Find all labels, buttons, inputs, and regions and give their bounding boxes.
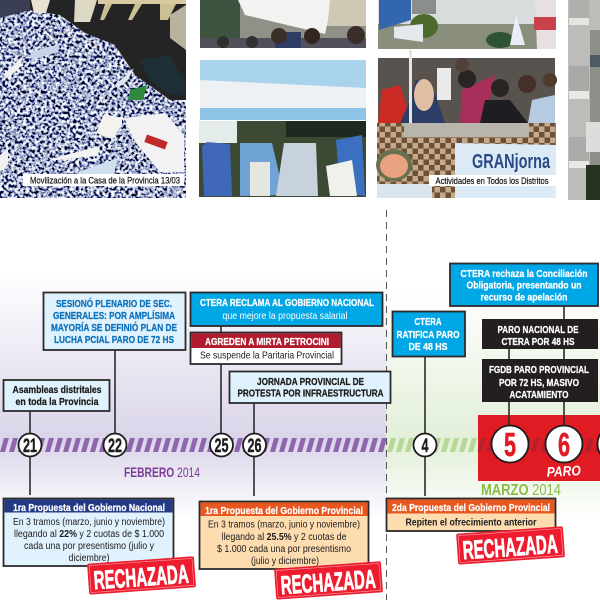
month: febrero: FEBRERO 2014 bbox=[124, 464, 200, 480]
stamp: Rechazada 2: RECHAZADA bbox=[280, 564, 377, 600]
box: Asambleas distritales: en toda la Provincia bbox=[16, 397, 99, 408]
box: Sesionó plenario: GENERALES: POR AMPLÍSIMA bbox=[53, 309, 175, 322]
box: CTERA ratifica: DE 48 HS bbox=[408, 342, 448, 353]
box: Paro nacional: PARO NACIONAL DE bbox=[498, 325, 579, 336]
box: Asambleas distritales: Asambleas distritales bbox=[12, 385, 102, 396]
date: 22 bbox=[104, 434, 126, 457]
caption: Actividades: Actividades en Todos los Distritos bbox=[436, 176, 549, 186]
connector lines bbox=[30, 306, 564, 496]
photo: tiled wall with sign bbox=[376, 123, 556, 198]
box: 1ra propuesta Gobierno Nacional: 1ra Propuesta del Gobierno Nacional bbox=[13, 502, 165, 514]
date: 21 bbox=[18, 434, 42, 457]
date: 22: 22 bbox=[108, 436, 122, 457]
photo: Argentine flag bbox=[200, 60, 366, 120]
photo: crowd march at Casa de la Provincia bbox=[0, 0, 186, 198]
date: 25: 25 bbox=[214, 436, 229, 457]
box: Paro nacional: CTERA POR 48 HS bbox=[502, 337, 575, 348]
box: Sesionó plenario: SESIONÓ PLENARIO DE SEC. bbox=[56, 297, 172, 310]
box: CTERA ratifica: CTERA bbox=[414, 317, 442, 328]
box: 2da propuesta Gobierno Provincial bbox=[386, 498, 556, 531]
box: Agreden a Mirta Petrocini: AGREDEN A MIRTA PETROCINI bbox=[205, 336, 329, 348]
box: CTERA reclama: que mejore la propuesta salarial bbox=[222, 310, 348, 322]
photo: clothesline with aprons bbox=[199, 121, 366, 197]
photo: march with flags at dusk bbox=[378, 0, 556, 49]
date: 6 bbox=[546, 426, 582, 463]
date: 5 bbox=[492, 426, 528, 463]
date: 21: 21 bbox=[23, 436, 37, 457]
box: 1ra propuesta Gobierno Provincial: llegando al 25.5% y 2 cuotas de bbox=[222, 532, 347, 543]
box: 1ra propuesta Gobierno Nacional: En 3 tramos (marzo, junio y noviembre) bbox=[13, 517, 165, 528]
photo: protesters close-up bbox=[378, 50, 557, 123]
box: 1ra propuesta Gobierno Provincial: En 3 tramos (marzo, junio y noviembre) bbox=[208, 520, 360, 530]
date: 4: 4 bbox=[422, 436, 429, 457]
box: 1ra propuesta Gobierno Provincial: $ 1.000 cada una por presentismo bbox=[217, 544, 351, 555]
stamp: Rechazada 1: RECHAZADA bbox=[93, 559, 190, 595]
background: febrero zone bbox=[0, 270, 386, 520]
photo: protest banner group bbox=[200, 0, 366, 48]
box: 2da propuesta Gobierno Provincial: Repiten el ofrecimiento anterior bbox=[406, 518, 537, 528]
box: 1ra propuesta Gobierno Nacional: llegando al 22% y 2 cuotas de $ 1.000 bbox=[14, 529, 164, 540]
photo: tiled wall with sign: GRANjorna bbox=[472, 151, 551, 173]
label: PARO: PARO bbox=[546, 462, 581, 480]
box: CTERA reclama: CTERA RECLAMA AL GOBIERNO NACIONAL bbox=[200, 297, 374, 309]
date: 4 bbox=[414, 434, 436, 457]
box: Jornada provincial: PROTESTA POR INFRAESTRUCTURA bbox=[238, 388, 384, 400]
box: Sesionó plenario: LUCHA PCIAL PARO DE 72 HS bbox=[54, 335, 174, 346]
stamp: Rechazada 2 bbox=[274, 561, 383, 600]
photo: apartment building balconies bbox=[568, 0, 600, 200]
box: CTERA rechaza bbox=[450, 264, 598, 306]
date: 26 bbox=[243, 434, 266, 457]
box: 1ra propuesta Gobierno Provincial bbox=[200, 502, 368, 569]
box: FGDB paro provincial bbox=[482, 359, 598, 402]
box: Paro nacional bbox=[482, 319, 598, 349]
date: 26: 26 bbox=[248, 436, 262, 457]
divider: month separator bbox=[386, 210, 388, 600]
timeline stripes: marzo bbox=[386, 438, 478, 452]
timeline stripes: febrero bbox=[0, 438, 386, 452]
box: CTERA rechaza: Obligatoria, presentando un bbox=[466, 280, 582, 292]
red strike zone bbox=[478, 415, 600, 481]
box: CTERA rechaza: recurso de apelación bbox=[480, 292, 568, 304]
stamp: Rechazada 1 bbox=[87, 556, 196, 596]
box: 1ra propuesta Gobierno Provincial: 1ra Propuesta del Gobierno Provincial bbox=[205, 505, 363, 517]
box: CTERA reclama bbox=[190, 292, 382, 326]
caption: Movilización: Movilización a la Casa de la Provincia 13/03 bbox=[30, 176, 180, 186]
date: next circle cropped bbox=[598, 426, 600, 462]
date: 6: 6 bbox=[558, 426, 570, 463]
stamp: Rechazada 3 bbox=[456, 526, 565, 566]
background: marzo zone bbox=[386, 290, 600, 520]
box: Jornada provincial: JORNADA PROVINCIAL DE bbox=[257, 377, 364, 388]
box: 2da propuesta Gobierno Provincial: 2da Propuesta del Gobierno Provincial bbox=[392, 502, 550, 514]
box: Sesionó plenario: MAYORÍA SE DEFINIÓ PLAN DE bbox=[51, 321, 177, 334]
box: Sesionó plenario bbox=[44, 292, 186, 350]
box: Agreden a Mirta Petrocini bbox=[190, 332, 342, 364]
box: Agreden a Mirta Petrocini: Se suspende la Paritaria Provincial bbox=[200, 350, 334, 362]
box: FGDB paro provincial: POR 72 HS, MASIVO bbox=[499, 378, 579, 389]
date: 5: 5 bbox=[504, 426, 516, 463]
box: 1ra propuesta Gobierno Nacional bbox=[4, 498, 174, 566]
box: Jornada provincial bbox=[230, 372, 390, 403]
box: FGDB paro provincial: ACATAMIENTO bbox=[510, 390, 569, 401]
box: 1ra propuesta Gobierno Nacional: cada una por presentismo (julio y bbox=[24, 541, 154, 552]
date: 25 bbox=[210, 434, 233, 457]
box: 1ra propuesta Gobierno Nacional: diciembre) bbox=[68, 553, 110, 564]
box: CTERA ratifica bbox=[392, 312, 465, 356]
box: 1ra propuesta Gobierno Provincial: (julio y diciembre) bbox=[251, 556, 319, 567]
box: Asambleas distritales bbox=[4, 380, 110, 411]
box: CTERA ratifica: RATIFICA PARO bbox=[396, 330, 460, 341]
month: marzo: MARZO 2014 bbox=[481, 482, 561, 499]
